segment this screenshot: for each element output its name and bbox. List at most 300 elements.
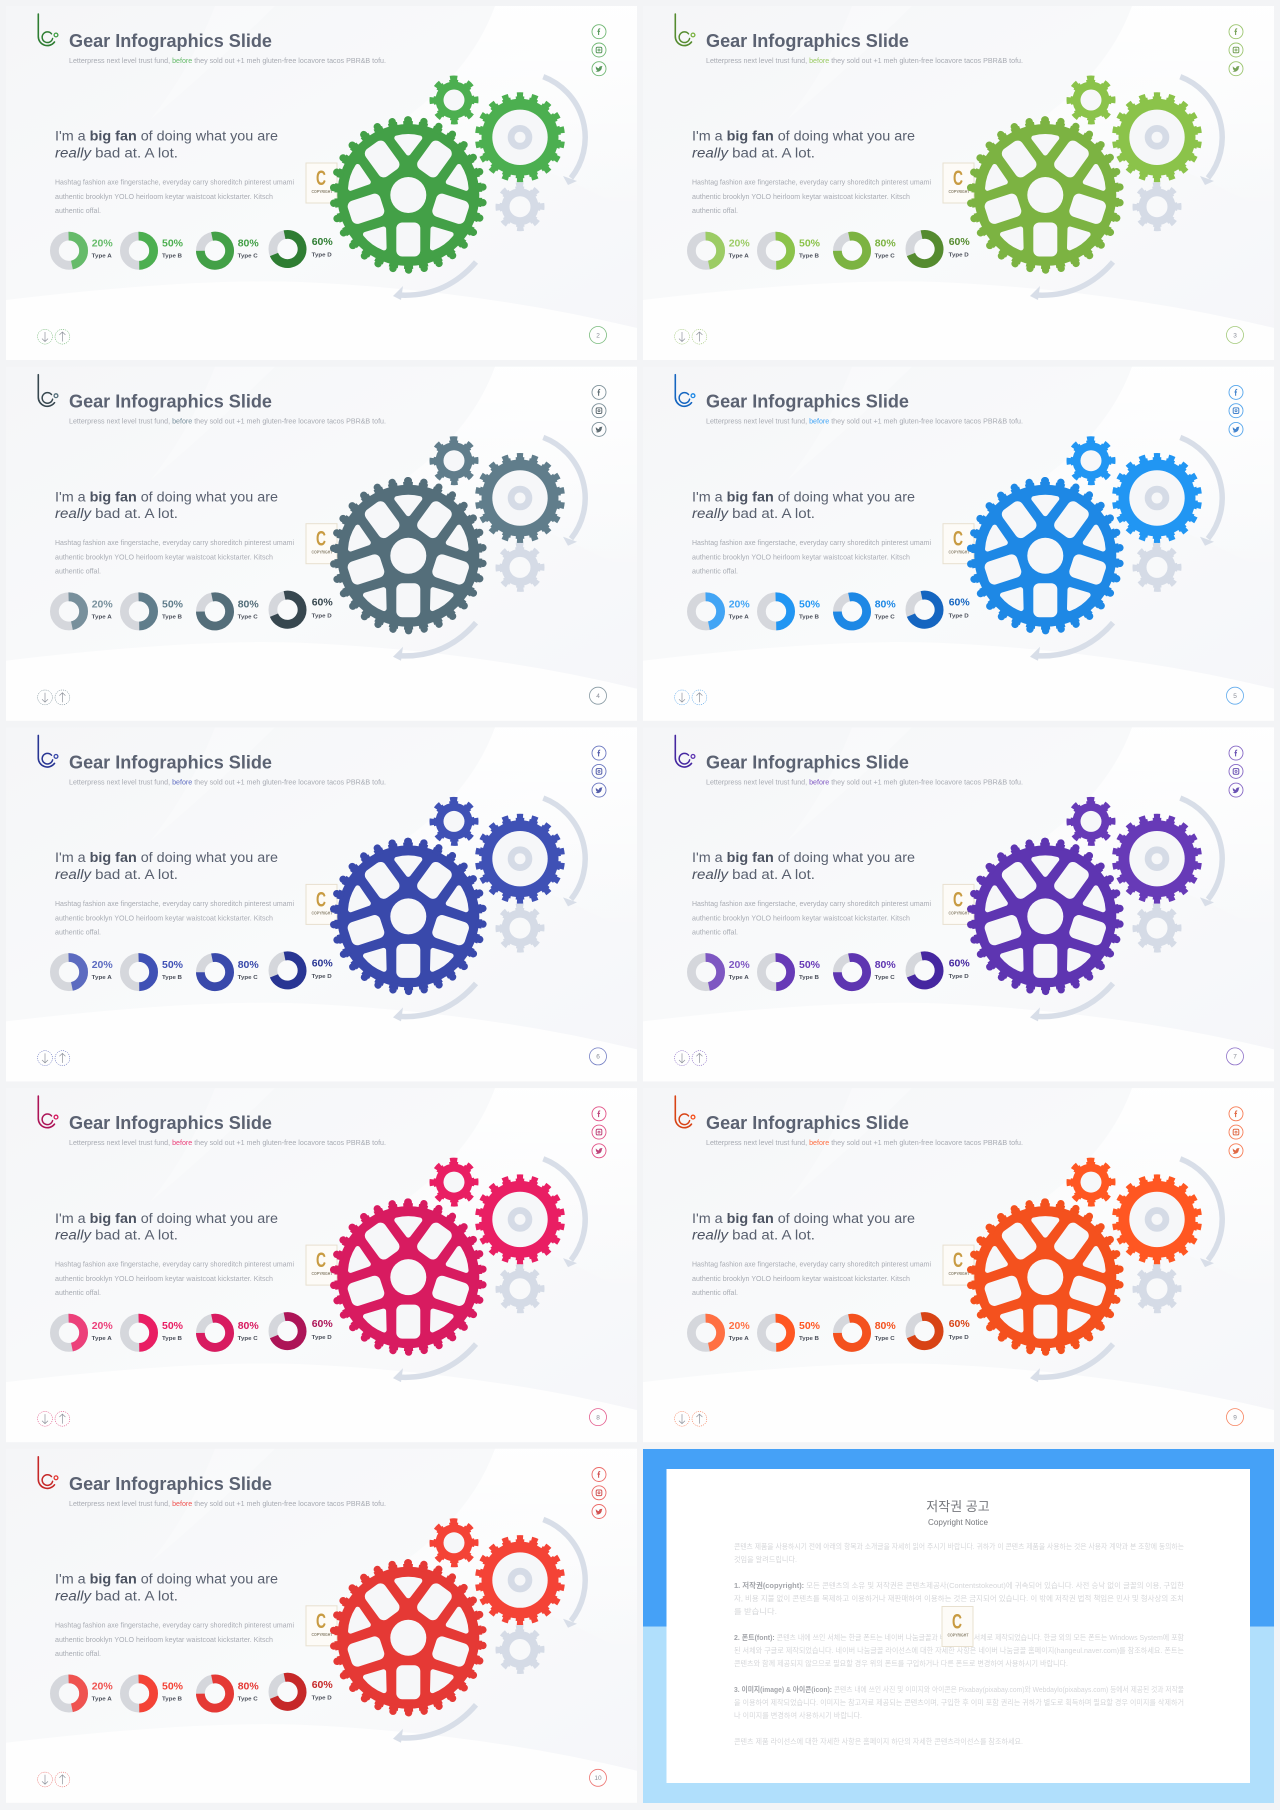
notice intro: 콘텐츠 제품을 사용하시기 전에 아래의 항목과 소개글을 자세히 읽어 주시기 바랍니다. 귀하가 이 콘텐츠 제품을 사용하는 것은 사용자 계약과 본 조항에 동의하는 xyxy=(734,1541,1184,1551)
panel background xyxy=(6,1449,637,1803)
watermark xyxy=(306,524,337,564)
headline: I'm a big fan of doing what you are xyxy=(55,1572,276,1588)
navigation arrows xyxy=(675,690,707,705)
social icons xyxy=(592,1468,606,1518)
slide panel: blue xyxy=(643,367,1274,721)
donut C xyxy=(198,1316,259,1350)
arrows: rotation arcs xyxy=(393,1520,585,1743)
gear: large xyxy=(333,1563,483,1713)
gear: small xyxy=(432,1521,476,1565)
donut A: Type A xyxy=(92,1697,113,1703)
body text: Hashtag fashion axe fingerstache, everyday carry shoreditch pinterest umami xyxy=(55,538,294,547)
donut B xyxy=(761,958,821,987)
navigation arrows xyxy=(38,690,70,705)
gear: gray xyxy=(1135,906,1179,950)
donut A: 20% xyxy=(92,598,113,610)
donut B: Type B xyxy=(799,1336,819,1342)
donut B xyxy=(761,597,821,626)
donut D xyxy=(908,232,970,266)
navigation arrows xyxy=(38,1411,70,1426)
donut A: 20% xyxy=(92,1681,113,1693)
navigation arrows xyxy=(38,1051,70,1066)
icon: logo xyxy=(675,375,695,406)
panel background xyxy=(643,6,1274,360)
slide panel: green xyxy=(6,6,637,360)
donut C xyxy=(835,955,896,989)
page number: 3 xyxy=(1233,332,1237,339)
donut B: 50% xyxy=(162,598,184,610)
donut A: 20% xyxy=(729,1320,750,1332)
subtitle: Letterpress next level trust fund, before they sold out +1 meh gluten-free locavore tacos PBR&B tofu. xyxy=(706,1138,1023,1147)
headline: I'm a big fan of doing what you are xyxy=(55,129,276,145)
gear: large xyxy=(333,120,483,270)
donut B: 50% xyxy=(799,959,821,971)
body text: Hashtag fashion axe fingerstache, everyday carry shoreditch pinterest umami xyxy=(55,1620,294,1629)
body text: authentic brooklyn YOLO heirloom keytar waistcoat kickstarter. Kitsch xyxy=(55,1274,273,1283)
blue frame: top half xyxy=(643,1449,1274,1627)
notice section 3: 을 이용하여 제작되었습니다. 이미지는 참고자료 제공되는 콘텐츠이며, 구입한 후 이미 포함 권리는 귀하가 별도로 획득하며 필요할 경우 이미지를 삭제하거 xyxy=(734,1697,1184,1707)
panel background xyxy=(6,727,637,1081)
gear: small xyxy=(1069,439,1113,483)
icon: logo xyxy=(38,14,58,46)
donut A xyxy=(54,1679,113,1708)
donut D: 60% xyxy=(949,597,970,609)
body text: Hashtag fashion axe fingerstache, everyday carry shoreditch pinterest umami xyxy=(692,1260,931,1269)
arrows: rotation arcs xyxy=(1030,798,1222,1021)
body text: authentic brooklyn YOLO heirloom keytar waistcoat kickstarter. Kitsch xyxy=(55,553,273,562)
donut B xyxy=(124,236,184,265)
body text: authentic brooklyn YOLO heirloom keytar waistcoat kickstarter. Kitsch xyxy=(55,192,273,201)
arrows: rotation arcs xyxy=(1030,77,1222,300)
donut A: 20% xyxy=(729,238,750,250)
headline: I'm a big fan of doing what you are xyxy=(55,1211,276,1227)
icon: logo xyxy=(675,1096,695,1128)
watermark xyxy=(943,1245,974,1285)
gear: medium xyxy=(1114,95,1200,180)
subtitle: Letterpress next level trust fund, before they sold out +1 meh gluten-free locavore tacos PBR&B tofu. xyxy=(69,56,386,65)
donut C: Type C xyxy=(238,1336,259,1342)
panel background xyxy=(6,1088,637,1442)
gear: medium xyxy=(1114,1177,1200,1262)
watermark xyxy=(943,163,974,203)
notice section 2: 된 서체와 구글로 제작되었습니다. 네이버 나눔글꼴 라이선스에 대한 자세한 사항은 네이버 나눔글꼴 홈페이지(hangeul.naver.com)를 참조하세요. 폰트는 xyxy=(734,1645,1184,1655)
donut C: 80% xyxy=(875,598,896,610)
gear: small xyxy=(432,1160,476,1204)
notice section 1: 자, 비용 지불 없이 콘텐츠를 복제하고 이용하거나 재판매하여 이용하는 것은 금지되어 있습니다. 이 밖에 저작권 법적 책임은 민사 및 형사상의 조치 xyxy=(734,1593,1184,1603)
gear: large xyxy=(333,481,483,631)
gear: gray xyxy=(1135,1267,1179,1311)
donut B xyxy=(124,1679,184,1708)
donut A xyxy=(691,958,750,987)
headline: really bad at. A lot. xyxy=(692,1228,810,1244)
body text: Hashtag fashion axe fingerstache, everyday carry shoreditch pinterest umami xyxy=(692,178,931,186)
arrows: rotation arcs xyxy=(1030,1159,1222,1382)
donut D: Type D xyxy=(949,613,969,619)
arrows: rotation arcs xyxy=(393,437,585,661)
watermark xyxy=(306,163,337,203)
body text: authentic brooklyn YOLO heirloom keytar waistcoat kickstarter. Kitsch xyxy=(692,192,910,201)
white notice sheet xyxy=(666,1469,1250,1783)
gear: gray xyxy=(498,545,542,589)
donut A: 20% xyxy=(92,238,113,250)
donut C: Type C xyxy=(238,254,259,260)
social icons xyxy=(1229,385,1243,436)
donut D: Type D xyxy=(312,1696,332,1702)
icon: logo xyxy=(38,1096,58,1128)
slide panel: purple xyxy=(643,727,1274,1081)
donut B: 50% xyxy=(162,959,184,971)
donut D: 60% xyxy=(312,1679,333,1691)
donut B: Type B xyxy=(162,614,182,620)
gear: small xyxy=(432,439,476,483)
donut C: 80% xyxy=(875,959,896,971)
donut D: Type D xyxy=(949,1335,969,1341)
notice section 3: 3. 이미지(image) & 아이콘(icon): 콘텐츠 내에 쓰인 사진 및 이미지와 아이콘은 Pixabay(pixabay.com)와 Webdaylo(pixabays.com) 등에서 제공된 것과 저작물 xyxy=(734,1685,1228,1694)
donut B: 50% xyxy=(162,1681,184,1693)
gear: medium xyxy=(478,456,562,540)
page number: 9 xyxy=(1233,1414,1237,1421)
title: Gear Infographics Slide xyxy=(706,752,909,772)
body text: Hashtag fashion axe fingerstache, everyday carry shoreditch pinterest umami xyxy=(55,178,294,186)
donut D: 60% xyxy=(949,1318,970,1330)
donut B xyxy=(761,236,821,265)
watermark xyxy=(306,1245,337,1285)
donut D: Type D xyxy=(949,253,969,259)
navigation arrows xyxy=(675,329,707,344)
donut A xyxy=(54,958,113,987)
notice section 3: 나 이미지를 변경하여 사용하시기 바랍니다. xyxy=(734,1710,862,1720)
donut D: Type D xyxy=(949,974,969,980)
gear: large xyxy=(333,1202,483,1352)
donut C xyxy=(835,1316,896,1350)
donut D xyxy=(271,953,333,987)
title: Gear Infographics Slide xyxy=(69,752,272,772)
panel background xyxy=(6,367,637,721)
donut A: Type A xyxy=(92,254,113,260)
donut C: 80% xyxy=(238,1681,259,1693)
social icons xyxy=(1229,1107,1243,1158)
social icons xyxy=(592,746,606,797)
panel background xyxy=(643,1088,1274,1442)
body text: authentic offal. xyxy=(692,1288,738,1297)
body text: authentic offal. xyxy=(55,206,101,215)
slide panel: blue grey xyxy=(6,367,637,721)
notice section 1: 를 받습니다. xyxy=(734,1606,777,1616)
headline: really bad at. A lot. xyxy=(55,146,173,162)
headline: really bad at. A lot. xyxy=(55,506,173,522)
navigation arrows xyxy=(38,329,70,344)
donut B: Type B xyxy=(162,975,182,981)
gear: medium xyxy=(478,95,562,180)
page number: 6 xyxy=(596,1054,600,1061)
icon: logo xyxy=(38,375,58,406)
subtitle: Letterpress next level trust fund, before they sold out +1 meh gluten-free locavore tacos PBR&B tofu. xyxy=(69,1499,386,1508)
headline: I'm a big fan of doing what you are xyxy=(55,850,276,866)
donut A: Type A xyxy=(729,254,750,260)
headline: I'm a big fan of doing what you are xyxy=(692,129,913,145)
donut C: Type C xyxy=(238,614,259,620)
notice subtitle: Copyright Notice xyxy=(928,1517,988,1527)
donut A xyxy=(54,1318,113,1347)
donut D: Type D xyxy=(312,974,332,980)
donut D xyxy=(908,953,970,987)
headline: really bad at. A lot. xyxy=(55,1588,173,1604)
body text: authentic brooklyn YOLO heirloom keytar waistcoat kickstarter. Kitsch xyxy=(692,913,910,922)
gear: gray xyxy=(498,185,542,229)
blue frame: bottom half xyxy=(643,1627,1274,1803)
watermark xyxy=(943,524,974,564)
page number: 10 xyxy=(594,1775,602,1782)
donut A xyxy=(691,236,750,265)
headline: I'm a big fan of doing what you are xyxy=(55,489,276,505)
social icons xyxy=(1229,746,1243,797)
donut B xyxy=(761,1318,821,1347)
subtitle: Letterpress next level trust fund, before they sold out +1 meh gluten-free locavore tacos PBR&B tofu. xyxy=(69,777,386,786)
body text: Hashtag fashion axe fingerstache, everyday carry shoreditch pinterest umami xyxy=(692,899,931,908)
subtitle: Letterpress next level trust fund, before they sold out +1 meh gluten-free locavore tacos PBR&B tofu. xyxy=(69,1138,386,1147)
donut B: 50% xyxy=(162,1320,184,1332)
slide panel: orange xyxy=(643,1088,1274,1442)
donut B: 50% xyxy=(162,238,184,250)
donut C xyxy=(835,234,896,268)
donut D: 60% xyxy=(312,957,333,969)
navigation arrows xyxy=(38,1772,70,1787)
social icons xyxy=(592,1107,606,1158)
donut B xyxy=(124,1318,184,1347)
donut A xyxy=(54,597,113,626)
notice section 2: 2. 폰트(font): 콘텐츠 내에 쓰인 서체는 한글 폰트는 네이버 나눔글꼴과 배달의민족 서체로 제작되었습니다. 한글 외의 모든 폰트는 Windows System에 포함 xyxy=(734,1633,1220,1642)
donut C xyxy=(835,594,896,628)
arrows: rotation arcs xyxy=(393,1159,585,1382)
gear: small xyxy=(432,78,476,122)
page number xyxy=(590,1048,606,1065)
headline: I'm a big fan of doing what you are xyxy=(692,1211,913,1227)
donut C: 80% xyxy=(238,1320,259,1332)
body text: Hashtag fashion axe fingerstache, everyday carry shoreditch pinterest umami xyxy=(692,538,931,547)
body text: authentic offal. xyxy=(55,1288,101,1297)
icon: logo xyxy=(38,1457,58,1488)
body text: authentic offal. xyxy=(55,1649,101,1658)
donut D xyxy=(908,1314,970,1348)
donut B: Type B xyxy=(162,1336,182,1342)
donut B: Type B xyxy=(799,975,819,981)
social icons xyxy=(592,385,606,436)
title: Gear Infographics Slide xyxy=(706,1113,909,1133)
donut B: Type B xyxy=(799,614,819,620)
notice closing: 콘텐츠 제품 라이선스에 대한 자세한 사항은 홈페이지 하단의 자세한 콘텐츠라이선스를 참조하세요. xyxy=(734,1736,1023,1746)
donut D xyxy=(908,593,970,627)
donut A: 20% xyxy=(729,598,750,610)
subtitle: Letterpress next level trust fund, before they sold out +1 meh gluten-free locavore tacos PBR&B tofu. xyxy=(706,417,1023,426)
gear: large xyxy=(970,841,1120,991)
subtitle: Letterpress next level trust fund, before they sold out +1 meh gluten-free locavore tacos PBR&B tofu. xyxy=(706,777,1023,786)
donut C xyxy=(198,955,259,989)
donut C: Type C xyxy=(875,1336,896,1342)
page number xyxy=(590,326,606,344)
gear: gray xyxy=(498,906,542,950)
page number xyxy=(1226,1048,1244,1065)
headline: really bad at. A lot. xyxy=(55,867,173,883)
slide panel: light green xyxy=(643,6,1274,360)
page number xyxy=(1226,1409,1244,1426)
subtitle: Letterpress next level trust fund, before they sold out +1 meh gluten-free locavore tacos PBR&B tofu. xyxy=(706,56,1023,65)
notice section 2: 콘텐츠와 함께 제공되지 않으므로 필요할 경우 위의 폰트를 구입하거나 다른 폰트로 변경하여 사용하시기 바랍니다. xyxy=(734,1658,1068,1668)
icon: logo xyxy=(675,14,695,46)
gear: large xyxy=(970,1202,1120,1352)
headline: I'm a big fan of doing what you are xyxy=(692,850,913,866)
page number xyxy=(1226,326,1244,344)
social icons xyxy=(1229,25,1243,76)
donut C: 80% xyxy=(238,238,259,250)
arrows: rotation arcs xyxy=(393,798,585,1021)
social icons xyxy=(592,25,606,76)
donut B: 50% xyxy=(799,1320,821,1332)
arrows: rotation arcs xyxy=(1030,437,1222,661)
icon: logo xyxy=(38,735,58,767)
gear: small xyxy=(432,799,476,843)
donut A: Type A xyxy=(729,975,750,981)
gear: medium xyxy=(478,1177,562,1262)
donut C: 80% xyxy=(238,598,259,610)
donut A: Type A xyxy=(92,1336,113,1342)
page number xyxy=(590,1769,606,1786)
donut A: Type A xyxy=(729,1336,750,1342)
panel: copyright notice xyxy=(643,1449,1274,1803)
donut D: 60% xyxy=(312,1318,333,1330)
donut C xyxy=(198,594,259,628)
donut D: 60% xyxy=(949,236,970,248)
title: Gear Infographics Slide xyxy=(69,1474,272,1494)
donut C: Type C xyxy=(238,975,259,981)
donut D xyxy=(271,593,333,627)
gear: medium xyxy=(478,1538,562,1623)
page number xyxy=(590,1409,606,1426)
donut A: Type A xyxy=(92,614,113,620)
panel background xyxy=(6,6,637,360)
donut D: 60% xyxy=(312,236,333,248)
panel background xyxy=(643,367,1274,721)
page number: 2 xyxy=(596,332,600,339)
headline: really bad at. A lot. xyxy=(692,867,810,883)
gear: gray xyxy=(498,1267,542,1311)
slide panel: red xyxy=(6,1449,637,1803)
donut D xyxy=(271,1314,333,1348)
body text: authentic offal. xyxy=(692,927,738,936)
title: Gear Infographics Slide xyxy=(706,392,909,412)
gear: medium xyxy=(1114,816,1200,901)
donut A: 20% xyxy=(729,959,750,971)
gear: large xyxy=(970,120,1120,270)
donut D: 60% xyxy=(949,957,970,969)
body text: authentic offal. xyxy=(55,567,101,576)
navigation arrows xyxy=(675,1051,707,1066)
watermark xyxy=(943,884,974,924)
donut D: 60% xyxy=(312,597,333,609)
body text: Hashtag fashion axe fingerstache, everyday carry shoreditch pinterest umami xyxy=(55,1260,294,1269)
donut B: 50% xyxy=(799,598,821,610)
body text: authentic brooklyn YOLO heirloom keytar waistcoat kickstarter. Kitsch xyxy=(55,913,273,922)
body text: authentic brooklyn YOLO heirloom keytar waistcoat kickstarter. Kitsch xyxy=(692,1274,910,1283)
donut C: Type C xyxy=(875,975,896,981)
watermark xyxy=(306,884,337,924)
donut C xyxy=(198,1677,259,1710)
body text: authentic offal. xyxy=(55,927,101,936)
donut A: 20% xyxy=(92,959,113,971)
gear: medium xyxy=(1114,456,1200,540)
gear: medium xyxy=(478,816,562,901)
gear: small xyxy=(1069,78,1113,122)
donut A xyxy=(691,1318,750,1347)
donut C: Type C xyxy=(875,614,896,620)
donut D xyxy=(271,1675,333,1709)
body text: authentic brooklyn YOLO heirloom keytar waistcoat kickstarter. Kitsch xyxy=(692,553,910,562)
title: Gear Infographics Slide xyxy=(69,1113,272,1133)
headline: really bad at. A lot. xyxy=(692,146,810,162)
icon: logo xyxy=(675,735,695,767)
donut A: Type A xyxy=(92,975,113,981)
watermark xyxy=(942,1606,973,1646)
donut A xyxy=(54,236,113,265)
headline: I'm a big fan of doing what you are xyxy=(692,489,913,505)
arrows: rotation arcs xyxy=(393,77,585,300)
donut D xyxy=(271,232,333,266)
donut A: 20% xyxy=(92,1320,113,1332)
gear: large xyxy=(970,481,1120,631)
donut B: Type B xyxy=(162,254,182,260)
page number: 5 xyxy=(1233,693,1237,700)
headline: really bad at. A lot. xyxy=(692,506,810,522)
donut C: Type C xyxy=(238,1697,259,1703)
watermark xyxy=(306,1606,337,1646)
page number: 8 xyxy=(596,1414,600,1421)
gear: small xyxy=(1069,1160,1113,1204)
body text: authentic brooklyn YOLO heirloom keytar waistcoat kickstarter. Kitsch xyxy=(55,1635,273,1644)
donut D: Type D xyxy=(312,1335,332,1341)
donut B xyxy=(124,597,184,626)
slide panel: indigo xyxy=(6,727,637,1081)
page number: 7 xyxy=(1233,1054,1237,1061)
subtitle: Letterpress next level trust fund, before they sold out +1 meh gluten-free locavore tacos PBR&B tofu. xyxy=(69,417,386,426)
donut D: Type D xyxy=(312,613,332,619)
body text: Hashtag fashion axe fingerstache, everyday carry shoreditch pinterest umami xyxy=(55,899,294,908)
notice section 1: 1. 저작권(copyright): 모든 콘텐츠의 소유 및 저작권은 콘텐츠제공사(Contentstokeout)에 귀속되어 있습니다. 사전 승낙 없이 글꼴의 이용, 구입한 xyxy=(734,1581,1192,1590)
navigation arrows xyxy=(675,1411,707,1426)
title: Gear Infographics Slide xyxy=(69,392,272,412)
notice intro: 것임을 알려드립니다. xyxy=(734,1554,797,1564)
title: Gear Infographics Slide xyxy=(69,31,272,51)
donut B xyxy=(124,958,184,987)
donut C: 80% xyxy=(238,959,259,971)
slide panel: pink xyxy=(6,1088,637,1442)
notice title: 저작권 공고 xyxy=(926,1499,990,1514)
headline: really bad at. A lot. xyxy=(55,1228,173,1244)
donut B: Type B xyxy=(799,254,819,260)
body text: authentic offal. xyxy=(692,206,738,215)
gear: gray xyxy=(498,1628,542,1672)
page number xyxy=(1226,687,1244,704)
donut B: 50% xyxy=(799,238,821,250)
donut C: Type C xyxy=(875,254,896,260)
gear: large xyxy=(333,841,483,991)
donut C xyxy=(198,234,259,268)
page number xyxy=(590,687,606,704)
donut C: 80% xyxy=(875,238,896,250)
donut D: Type D xyxy=(312,253,332,259)
donut B: Type B xyxy=(162,1697,182,1703)
donut A xyxy=(691,597,750,626)
donut C: 80% xyxy=(875,1320,896,1332)
gear: gray xyxy=(1135,185,1179,229)
